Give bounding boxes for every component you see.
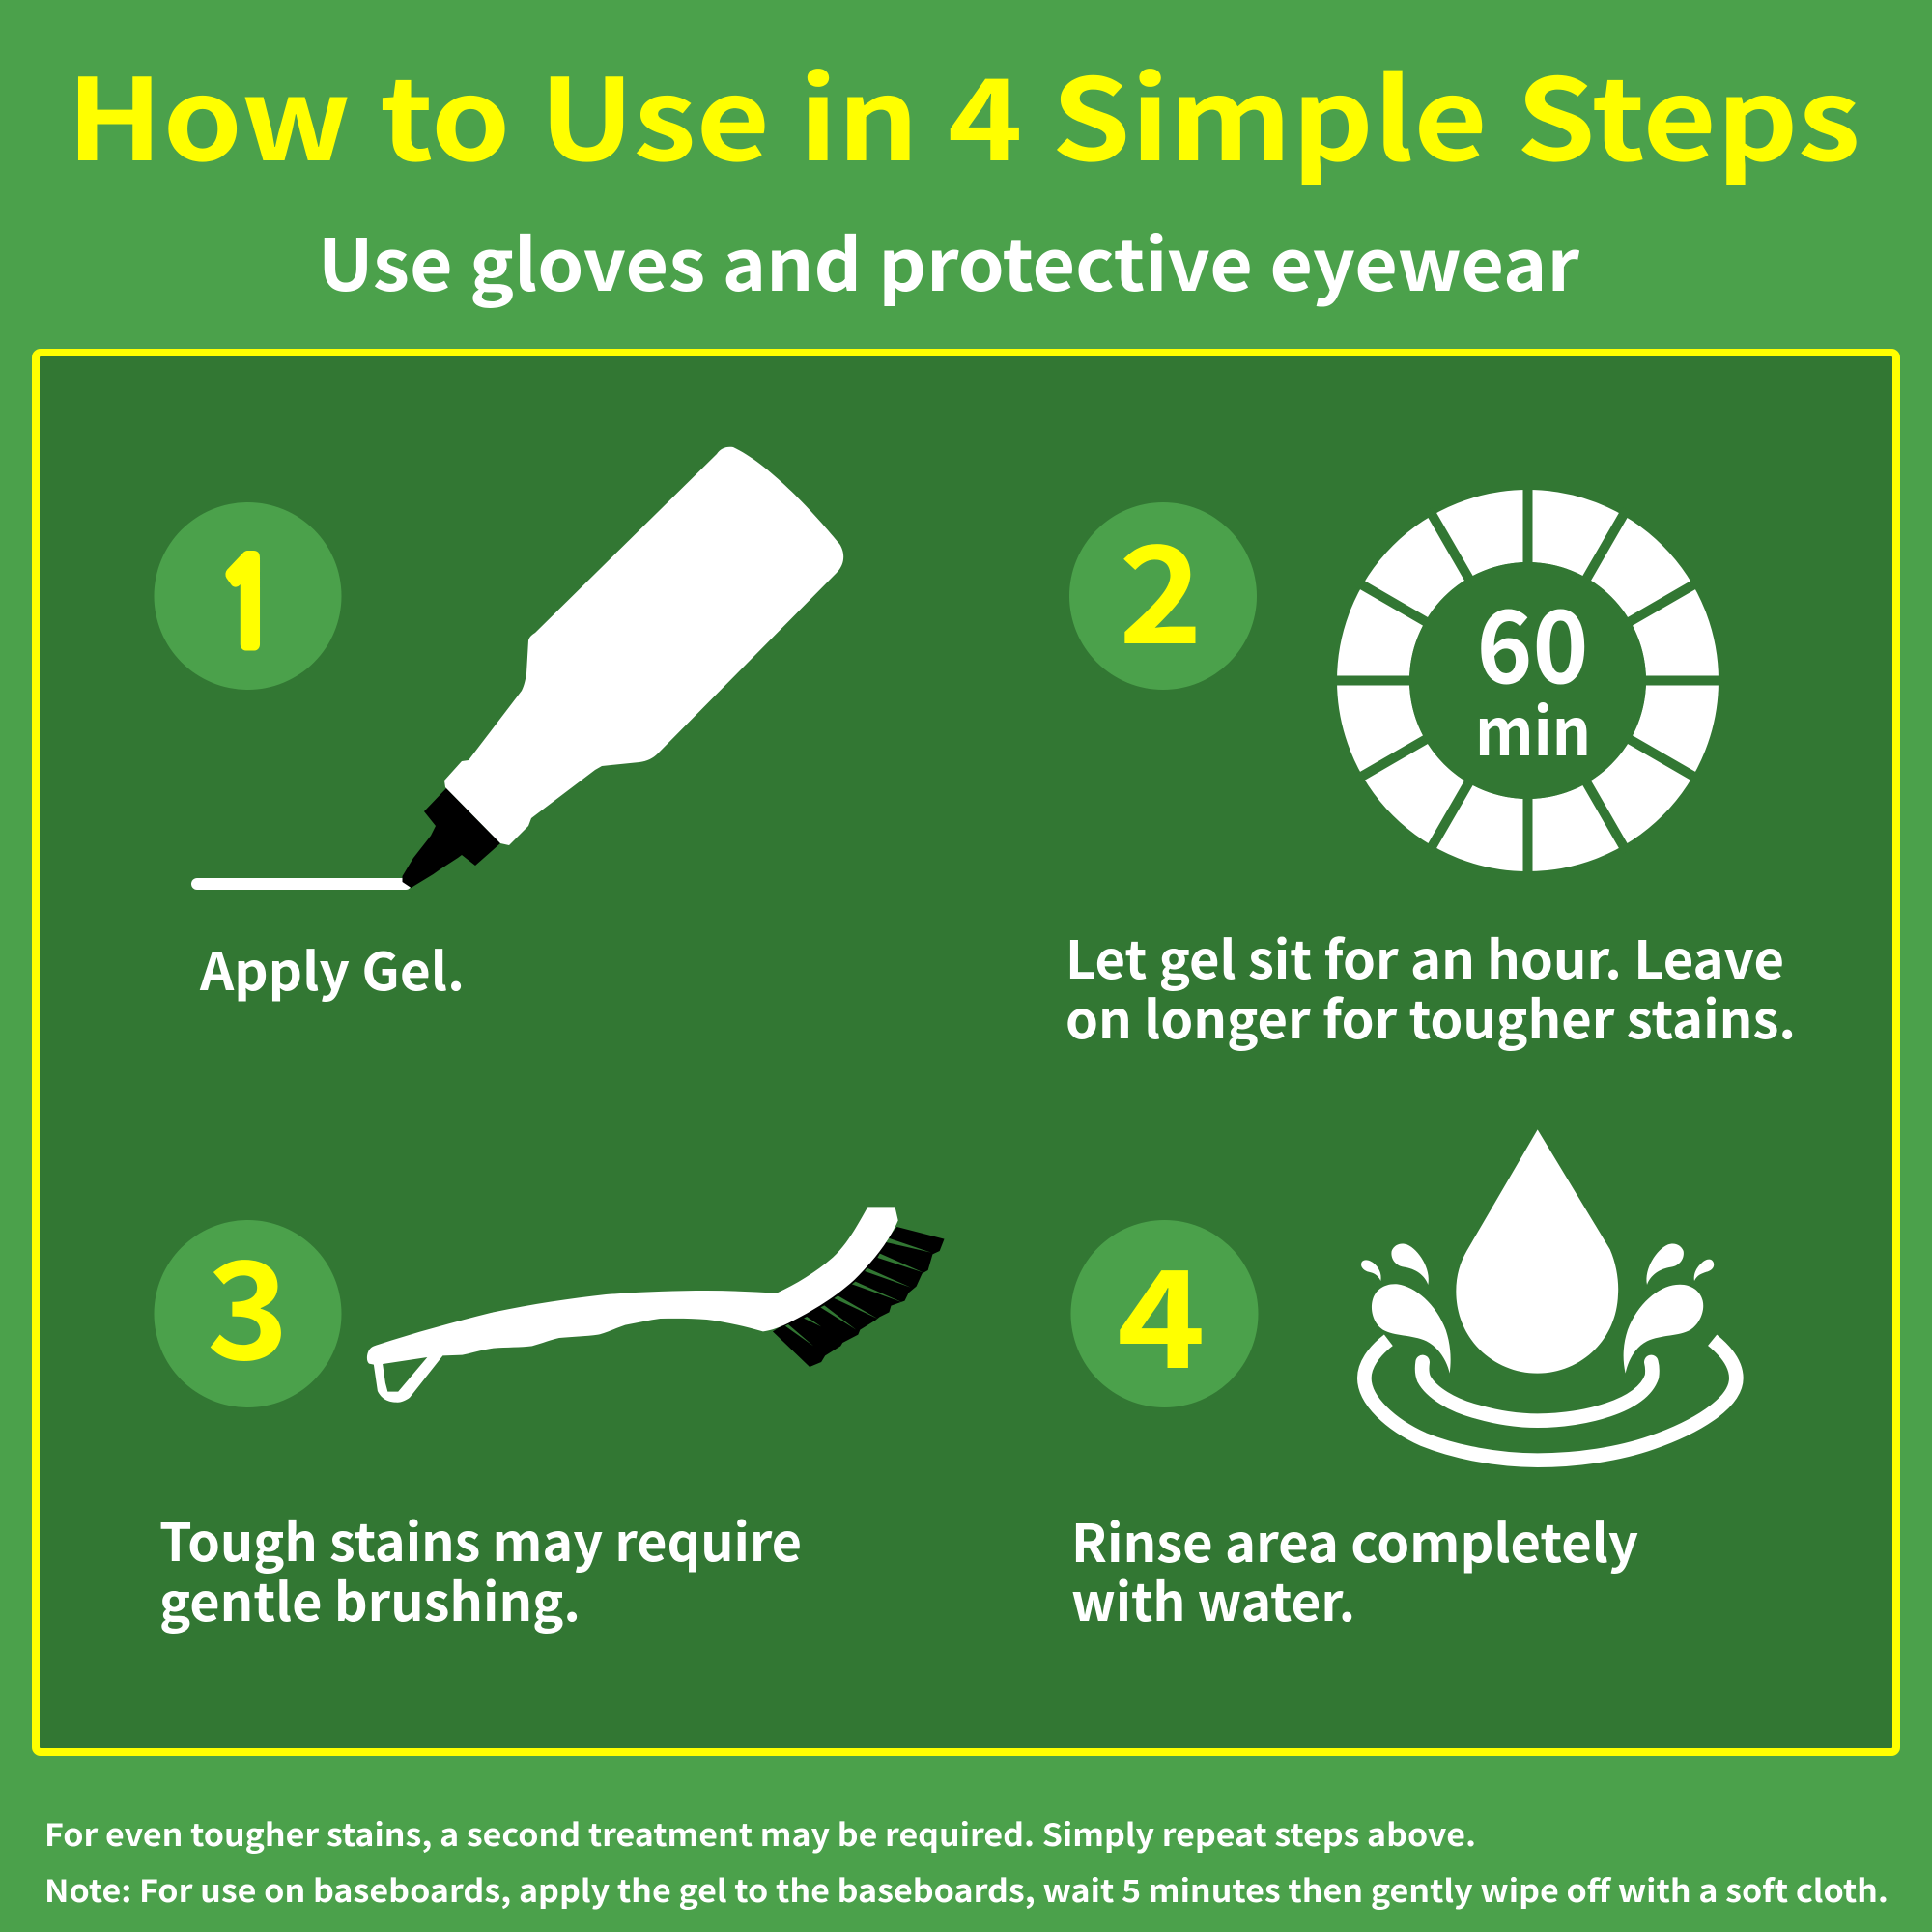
step 3 number badge bbox=[155, 1204, 342, 1407]
step 2 bbox=[1065, 483, 1796, 1054]
panel: steps bbox=[36, 353, 1896, 1752]
step 1 bbox=[155, 447, 843, 1006]
icon: 60 minute timer bbox=[1330, 483, 1725, 878]
step 4 text: Rinse area completely bbox=[1071, 1501, 1638, 1577]
icon: scrub brush bbox=[367, 1207, 945, 1403]
step 2 number badge bbox=[1069, 488, 1257, 690]
step 1 text: Apply Gel. bbox=[199, 929, 465, 1006]
step 2 number badge: 2 bbox=[1119, 488, 1203, 683]
step 3 text: gentle brushing. bbox=[159, 1560, 581, 1636]
step 4 number badge bbox=[1070, 1212, 1258, 1407]
footer notes: Note: For use on baseboards, apply the gel to the baseboards, wait 5 minutes then gently wipe off with a soft cloth. bbox=[44, 1867, 1889, 1912]
step 2 text: on longer for tougher stains. bbox=[1065, 978, 1796, 1054]
step 3 bbox=[155, 1204, 945, 1636]
icon: 60 minute timer: 60 bbox=[1476, 566, 1588, 712]
icon: 60 minute timer: min bbox=[1475, 679, 1591, 775]
step 1 number badge: 1 bbox=[216, 547, 279, 664]
subtitle: Use gloves and protective eyewear bbox=[318, 209, 1580, 312]
step 4 bbox=[1070, 1129, 1736, 1636]
step 4 text: with water. bbox=[1071, 1560, 1355, 1636]
step 1 number badge bbox=[155, 502, 342, 690]
step 3 text bbox=[159, 1500, 802, 1636]
icon: gel bottle bbox=[191, 447, 843, 890]
step 4 text bbox=[1071, 1501, 1638, 1636]
title: How to Use in 4 Simple Steps bbox=[67, 29, 1861, 193]
step 4 number badge: 4 bbox=[1117, 1212, 1206, 1407]
step 3 text: Tough stains may require bbox=[159, 1500, 802, 1577]
step 2 text: Let gel sit for an hour. Leave bbox=[1065, 918, 1784, 994]
footer notes: For even tougher stains, a second treatment may be required. Simply repeat steps above. bbox=[44, 1811, 1476, 1856]
step 2 text bbox=[1065, 918, 1796, 1054]
footer notes bbox=[44, 1811, 1889, 1912]
icon: water drop splash bbox=[1361, 1129, 1736, 1461]
step 3 number badge: 3 bbox=[207, 1204, 289, 1399]
